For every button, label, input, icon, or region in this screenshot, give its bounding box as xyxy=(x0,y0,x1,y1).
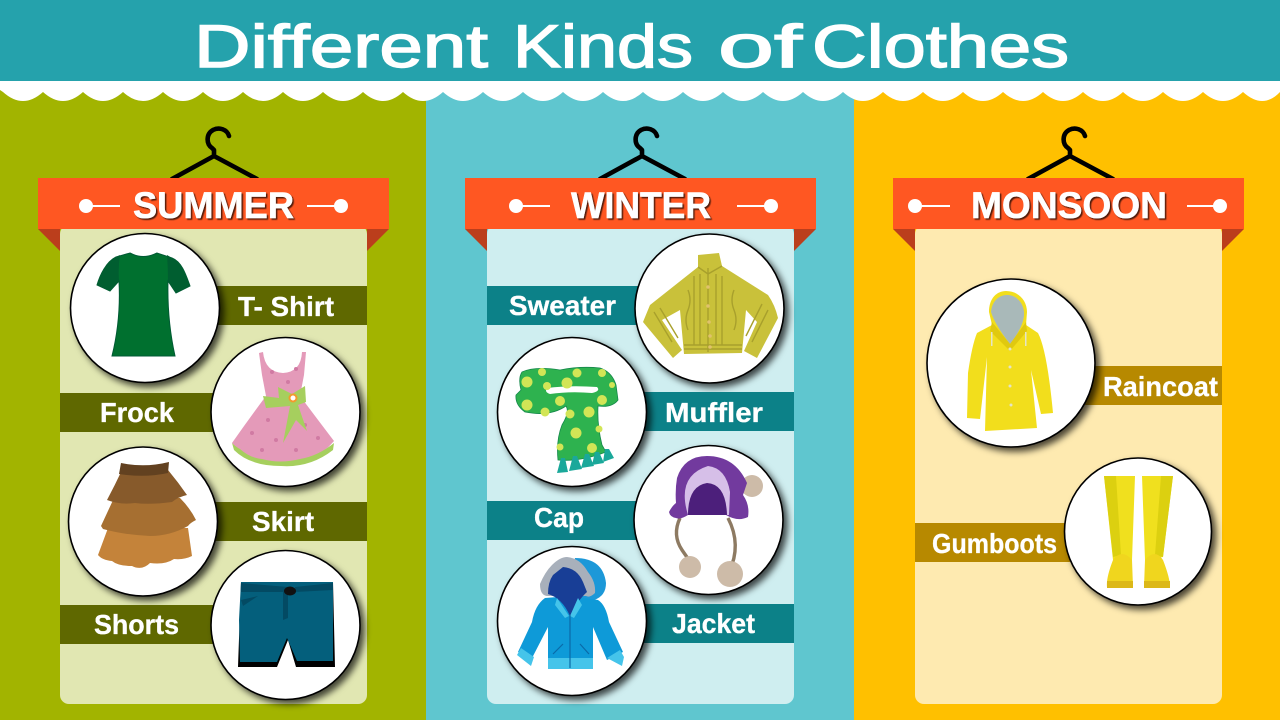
winter card xyxy=(487,225,794,704)
heading banner xyxy=(465,178,816,229)
banner folds xyxy=(893,229,1244,251)
panel: monsoon xyxy=(893,129,1244,704)
background: winter column xyxy=(426,90,854,720)
circle: jacket xyxy=(498,546,646,696)
title: Different xyxy=(194,13,488,80)
label: Cap xyxy=(487,501,647,540)
banner folds xyxy=(465,229,816,251)
label: Gumboots: Gumboots xyxy=(932,528,1057,559)
monsoon card xyxy=(915,225,1222,704)
title: Clothes xyxy=(812,13,1069,80)
label: T-shirt xyxy=(190,286,367,325)
title banner xyxy=(0,0,1280,81)
circle: shorts xyxy=(211,550,360,700)
label: Jacket: Jacket xyxy=(672,608,755,639)
scalloped white trim xyxy=(0,81,1280,101)
hanger xyxy=(1028,129,1113,179)
circle: gumboots xyxy=(1064,458,1212,605)
heading banner: SUMMER xyxy=(133,185,294,226)
background: monsoon column xyxy=(854,90,1280,720)
heading banner xyxy=(38,178,389,229)
heading banner: WINTER xyxy=(571,185,711,226)
label: Sweater xyxy=(487,286,650,325)
label: Cap: Cap xyxy=(534,502,584,533)
label: Frock: Frock xyxy=(100,397,174,428)
circle: raincoat xyxy=(927,279,1095,447)
label: Frock xyxy=(60,393,230,432)
circle: cap xyxy=(634,446,783,594)
banner folds xyxy=(38,229,389,251)
hanger xyxy=(600,129,685,179)
title: Kinds xyxy=(513,13,693,80)
circle: sweater xyxy=(635,234,784,383)
panel: summer xyxy=(38,129,389,704)
background: summer column xyxy=(0,90,426,720)
hanger xyxy=(172,129,257,179)
label: T-shirt: T- Shirt xyxy=(238,291,334,322)
label: Sweater: Sweater xyxy=(509,290,616,321)
summer card xyxy=(60,225,367,704)
panel: winter xyxy=(465,129,816,704)
heading banner xyxy=(893,178,1244,229)
heading banner: MONSOON xyxy=(971,185,1167,226)
circle: muffler xyxy=(498,338,646,486)
title: of xyxy=(718,13,803,80)
label: Raincoat xyxy=(1085,366,1222,405)
circle: skirt xyxy=(68,447,218,596)
label: Skirt: Skirt xyxy=(252,506,314,537)
label: Muffler xyxy=(630,392,794,431)
label: Muffler: Muffler xyxy=(665,397,763,428)
label: Jacket xyxy=(630,604,794,643)
label: Raincoat: Raincoat xyxy=(1103,371,1218,402)
label: Shorts: Shorts xyxy=(94,609,179,640)
title xyxy=(194,13,1069,80)
label: Shorts xyxy=(60,605,230,644)
circle: frock xyxy=(211,338,360,486)
circle: T-shirt xyxy=(70,234,220,382)
label: Skirt xyxy=(200,502,367,541)
